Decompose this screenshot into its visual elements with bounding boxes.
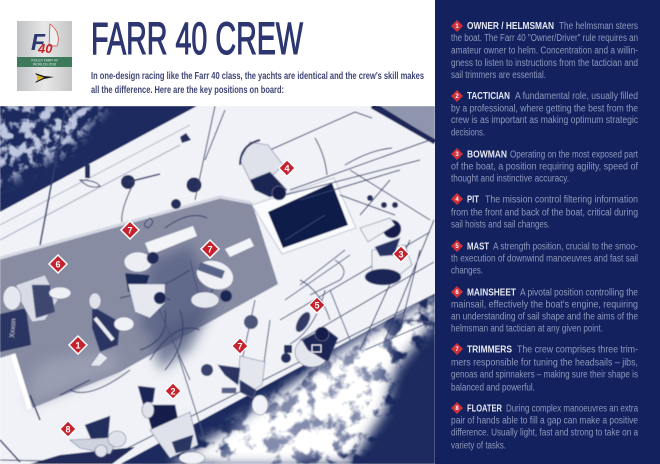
marker 7 lower: 7 [237,342,243,352]
crew member at pit [240,140,287,200]
position 7: trimmers: balanced and powerful. [451,382,535,394]
ropes and rigging [0,106,434,462]
trimmer middle [190,260,234,308]
position 8: floater: variety of tasks. [451,440,506,452]
photo: yacht deck seen from above: Xxxon [9,318,18,338]
trimmer lower [218,356,268,415]
position 2: tactician: 2 [455,94,459,100]
marker 7 upper left [121,221,139,239]
position 7: trimmers: mers responsible for tuning the headsails – jibs, [451,358,638,368]
trimmer upper left [124,252,166,318]
marker 7 middle [201,240,219,258]
position 3: bowman: 3 [455,152,459,158]
sea [0,100,435,464]
position 1: owner / helmsman: sail trimmers are essential. [451,70,546,81]
marker 6 [49,255,67,273]
marker 1: 1 [75,340,81,350]
position 8: floater [451,402,638,452]
flag and stern [0,308,31,352]
marker 5 [309,297,325,313]
position 7: trimmers [451,343,638,394]
logo: Rolex Farr 40 Worlds 2016: ROLEX FARR 40 [31,58,58,62]
position 2: tactician: decisions. [451,128,485,138]
position 4: pit: The mission control filtering information [485,194,638,206]
position 5: mast [451,240,638,276]
crew [3,140,412,464]
deck winches [85,133,398,376]
marker 5: 5 [314,300,320,310]
position 4: pit [451,193,638,230]
position 6: mainsheet: A pivotal position controlling the [520,288,638,298]
cockpit floor [0,197,278,409]
mainsheet trimmer [3,275,71,322]
position 6: mainsheet: 6 [455,290,459,296]
bowman [360,218,412,285]
position 5: mast: MAST [467,242,489,252]
mast crew [293,310,338,367]
position 1: owner / helmsman: OWNER / HELMSMAN [467,21,554,32]
hatch [268,183,348,248]
floater [70,416,126,457]
position 4: pit: 4 [455,197,459,203]
intro text: all the difference. Here are the key positions on board: [91,85,284,96]
marker 3: 3 [398,250,404,260]
position 3: bowman: thought and instinctive accuracy. [451,174,569,184]
marker 4: 4 [284,164,290,174]
marker 8: 8 [65,424,71,434]
photo: yacht deck seen from above [0,100,435,464]
position 7: trimmers: The crew comprises three trim- [517,344,638,356]
marker 1 [69,336,87,354]
position 5: mast: changes. [451,266,483,276]
position 1: owner / helmsman [451,20,638,81]
position 1: owner / helmsman: 1 [455,24,459,30]
helmsman [89,293,134,366]
logo: Rolex Farr 40 Worlds 2016: 40 [37,41,53,56]
intro text [91,71,424,96]
marker 6: 6 [55,260,61,270]
position 6: mainsheet [451,286,638,334]
position 4: pit: PIT [467,194,479,206]
marker 7 lower [232,338,248,354]
position 6: mainsheet: MAINSHEET [467,288,516,298]
position 6: mainsheet: helmsman and tactician at any given point. [451,324,603,334]
panel: crew positions [435,0,660,464]
white winch pedestal bar [145,226,197,255]
logo: Rolex Farr 40 Worlds 2016: WORLDS 2016 [33,62,56,66]
hull [0,106,435,464]
position 5: mast: 5 [455,244,459,250]
marker 2: 2 [170,386,176,396]
marker 2 [165,383,181,399]
marker 7 upper left: 7 [127,226,133,236]
position 7: trimmers: TRIMMERS [467,344,512,356]
position 6: mainsheet: mainsail, effectively the boat's engine, requiring [451,300,638,310]
position 7: trimmers: 7 [455,347,459,353]
position 1: owner / helmsman: The helmsman steers [559,21,638,32]
logo: Rolex Farr 40 Worlds 2016: F [31,29,46,55]
intro text: In one-design racing like the Farr 40 class, the yachts are identical and the crew's skill makes [91,71,424,82]
tactician [138,386,205,464]
position 8: floater: FLOATER [467,404,503,414]
coachroof [252,178,356,254]
position 3: bowman: BOWMAN [467,150,507,160]
position 2: tactician: TACTICIAN [467,91,510,102]
marker 8 [60,421,76,437]
position 3: bowman [451,148,638,184]
position 2: tactician: A fundamental role, usually filled [515,91,638,102]
marker 7 middle: 7 [207,244,213,254]
position 3: bowman: of the boat, a position requiring agility, speed of [451,162,638,172]
position 4: pit: sail hoists and sail changes. [451,220,550,230]
marker 3 [393,246,409,262]
logo: Rolex Farr 40 Worlds 2016 [17,21,72,91]
title: FARR 40 CREW [91,13,303,64]
position 8: floater: 8 [455,406,459,412]
marker 4 [279,160,295,176]
dark gear in cockpit [140,245,215,345]
position 2: tactician [451,90,638,138]
